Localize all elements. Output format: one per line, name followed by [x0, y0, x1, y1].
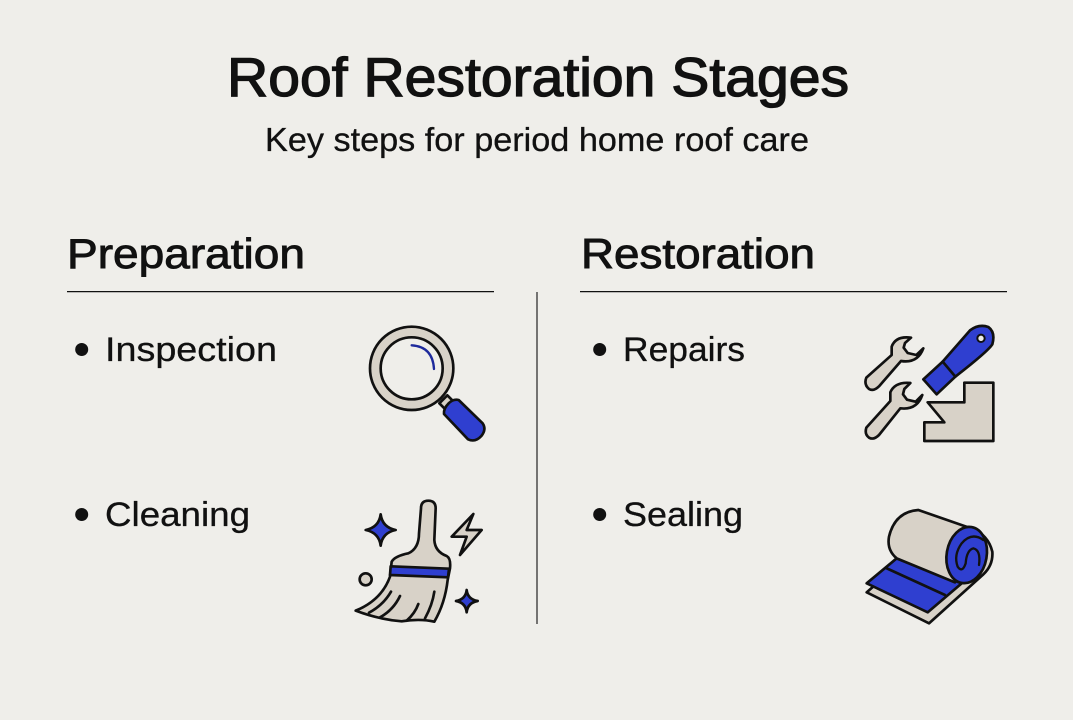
subtitle: Key steps for period home roof care [265, 122, 809, 159]
icon: wrenches, scraper and stair [865, 326, 993, 441]
item: repairs: Repairs [623, 331, 745, 369]
item: inspection: Inspection [105, 331, 277, 369]
icon: membrane roll [867, 510, 992, 623]
heading: restoration: Restoration [581, 230, 815, 277]
panel: preparation [67, 230, 494, 622]
title: Roof Restoration Stages [227, 46, 849, 108]
icon: broom with sparkles [356, 501, 482, 622]
divider [536, 292, 538, 624]
panel: restoration [580, 230, 1007, 623]
item: sealing: Sealing [623, 496, 743, 534]
heading: preparation: Preparation [67, 230, 305, 277]
icon: magnifying glass [370, 327, 484, 440]
item: cleaning: Cleaning [105, 496, 250, 534]
